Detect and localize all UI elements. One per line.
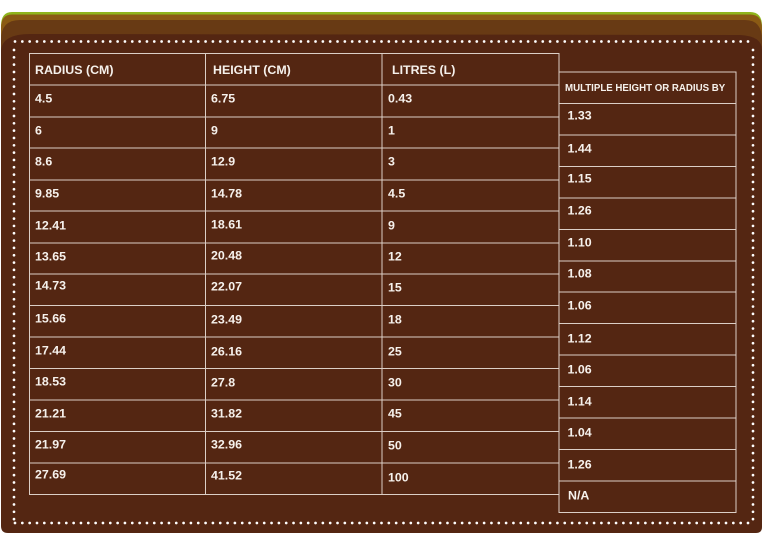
column: radius: 6 (35, 124, 42, 138)
column: radius: 9.85 (35, 186, 59, 200)
column: radius: 4.5 (35, 92, 52, 106)
column: litres: LITRES (L) (392, 63, 455, 77)
multiplier values: 1.06 (568, 298, 592, 312)
column: radius: RADIUS (CM) (35, 63, 113, 77)
column: height: 32.96 (211, 438, 242, 452)
column: litres: 15 (388, 280, 402, 294)
multiplier values: 1.15 (568, 172, 592, 186)
column: litres: 3 (388, 154, 395, 168)
multiplier values: 1.06 (568, 362, 592, 376)
column: radius: 12.41 (35, 218, 66, 232)
column: litres: 25 (388, 344, 402, 358)
column: radius: 17.44 (35, 344, 66, 358)
column: litres: 4.5 (388, 186, 405, 200)
table grid lines (30, 54, 559, 494)
multiplier values: 1.10 (568, 236, 592, 250)
column: height: 12.9 (211, 154, 235, 168)
column: height: 31.82 (211, 406, 242, 420)
column: litres: 12 (388, 250, 402, 264)
column: height: 18.61 (211, 218, 242, 232)
column: radius (35, 63, 113, 482)
multiplier values: 1.14 (568, 394, 592, 408)
column: radius: 21.97 (35, 438, 66, 452)
column: height (211, 63, 291, 482)
column: litres (388, 63, 455, 484)
column: litres: 100 (388, 470, 409, 484)
multiplier table (559, 72, 736, 512)
multiplier values: N/A (568, 488, 589, 502)
multiplier values (568, 108, 592, 502)
main table (30, 54, 559, 494)
column: litres: 45 (388, 406, 402, 420)
multiplier values: 1.33 (568, 108, 592, 122)
column: litres: 50 (388, 438, 402, 452)
column: height: 9 (211, 124, 218, 138)
multiplier values: 1.12 (568, 332, 592, 346)
column: height: 14.78 (211, 186, 242, 200)
multiplier values: 1.44 (568, 142, 592, 156)
multiplier heading: MULTIPLE HEIGHT OR RADIUS BY (565, 83, 726, 94)
column: litres: 0.43 (388, 92, 412, 106)
column: height: 22.07 (211, 280, 242, 294)
column: height: 23.49 (211, 312, 242, 326)
column: litres: 9 (388, 218, 395, 232)
multiplier values: 1.08 (568, 266, 592, 280)
multiplier grid lines (559, 72, 736, 512)
multiplier values: 1.26 (568, 458, 592, 472)
column: radius: 15.66 (35, 312, 66, 326)
column: litres: 30 (388, 376, 402, 390)
multiplier values: 1.04 (568, 426, 592, 440)
column: radius: 13.65 (35, 250, 66, 264)
column: height: 20.48 (211, 248, 242, 262)
column: litres: 18 (388, 312, 402, 326)
column: height: 41.52 (211, 468, 242, 482)
column: height: 6.75 (211, 92, 235, 106)
column: radius: 27.69 (35, 468, 66, 482)
column: radius: 18.53 (35, 374, 66, 388)
column: radius: 21.21 (35, 406, 66, 420)
column: radius: 8.6 (35, 154, 52, 168)
column: height: 26.16 (211, 344, 242, 358)
column: radius: 14.73 (35, 278, 66, 292)
column: height: 27.8 (211, 376, 235, 390)
column: height: HEIGHT (CM) (213, 63, 291, 77)
multiplier values: 1.26 (568, 204, 592, 218)
column: litres: 1 (388, 124, 395, 138)
